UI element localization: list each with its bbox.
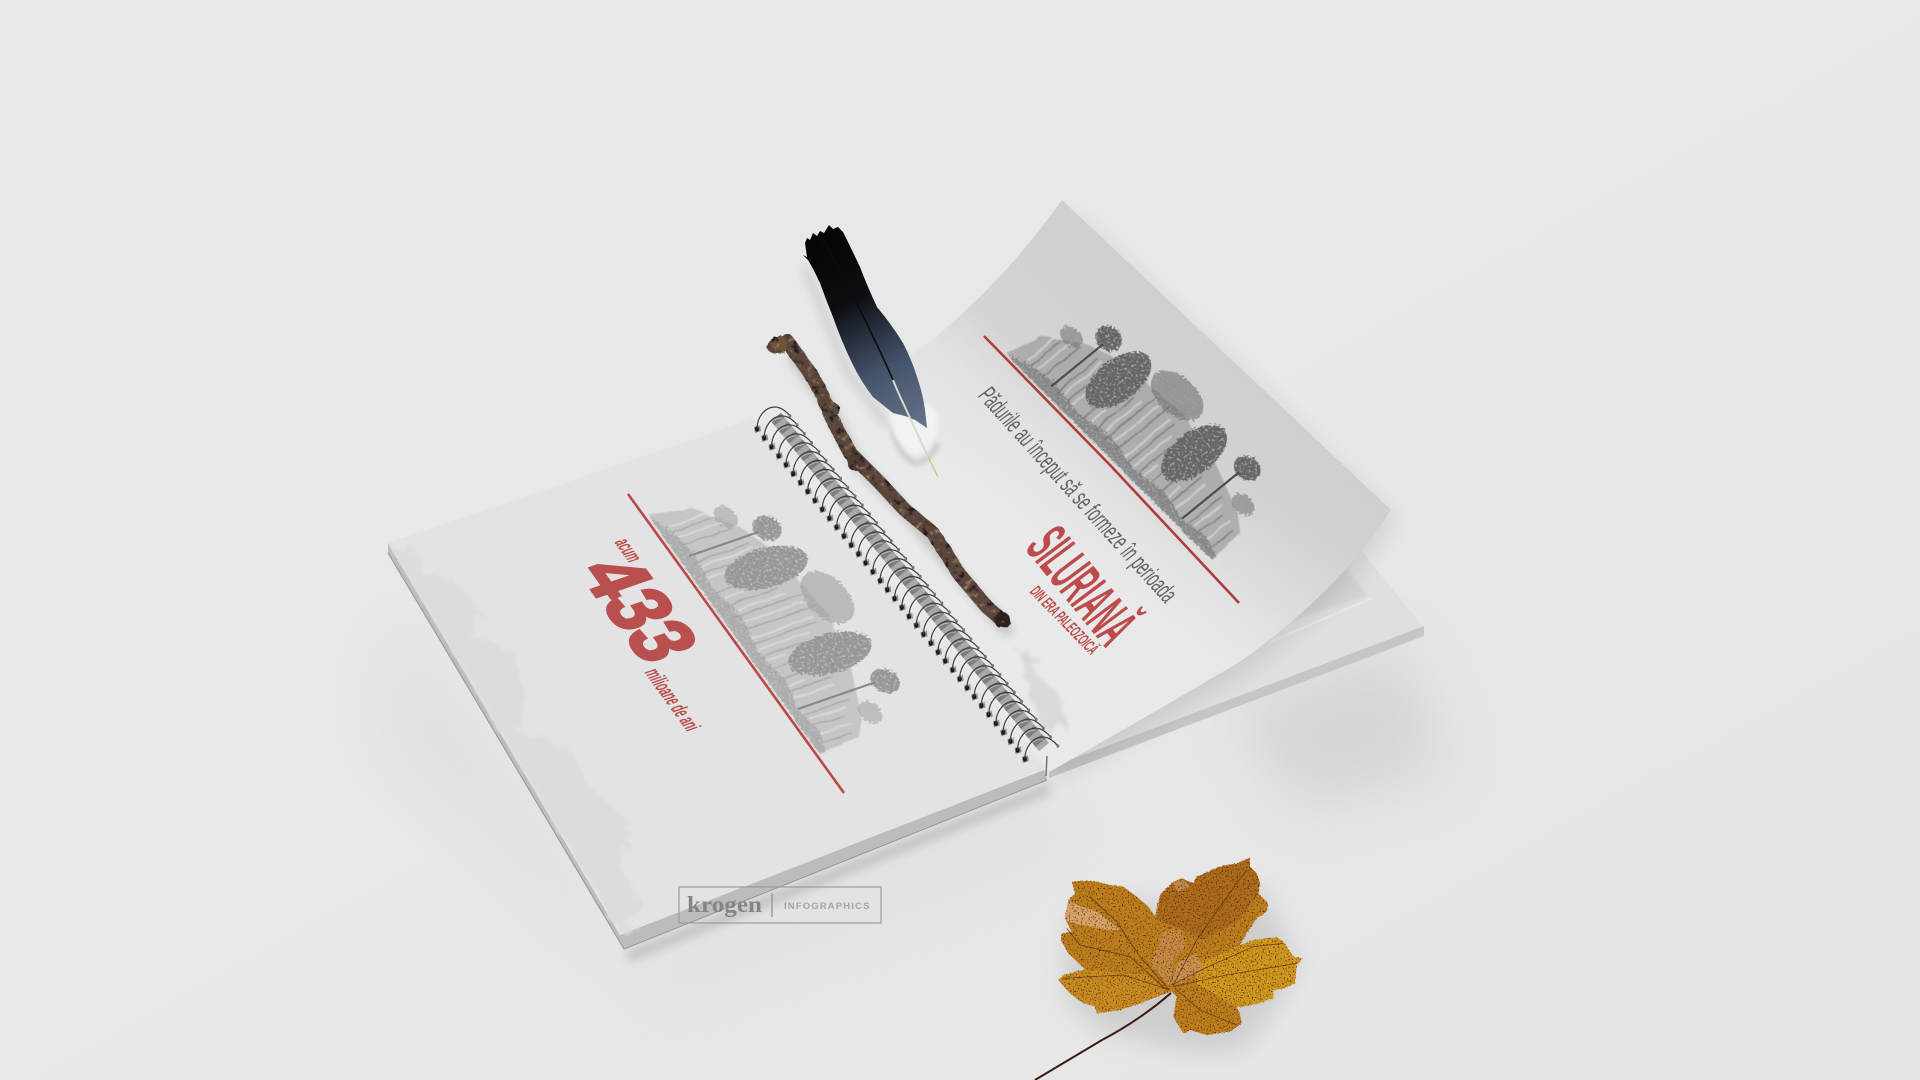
panel: right curled notebook page: SILURIANĂ <box>1013 515 1150 657</box>
engraving: forest, left page <box>648 475 936 754</box>
text: acum: acum <box>609 535 648 565</box>
text: DIN ERA PALEOZOICĂ: DIN ERA PALEOZOICĂ <box>1026 583 1103 658</box>
logo: krogen infographics: krogen <box>687 892 762 917</box>
engraving: forest, right page <box>1006 284 1298 560</box>
leaf blade outline <box>1058 857 1303 1035</box>
icon: twig <box>772 337 1010 633</box>
top lobe tone <box>1157 857 1260 940</box>
right lobe tone <box>1197 937 1303 1007</box>
leaf veins <box>1063 870 1297 1025</box>
feather fluff <box>890 402 938 463</box>
icon: feather <box>803 225 938 477</box>
leaf stem <box>1035 993 1171 1080</box>
forest silhouette watermark <box>392 548 642 932</box>
icon: autumn leaf <box>1035 857 1303 1080</box>
text: Pădurile au început să se formeze în perioada: Pădurile au început să se formeze în perioada <box>972 382 1185 608</box>
lower-left lobe tone <box>1058 969 1167 1013</box>
spiral binding <box>754 407 1059 776</box>
logo: krogen infographics <box>679 887 881 923</box>
red divider line <box>628 494 844 793</box>
center fold <box>1150 928 1185 987</box>
panel: right curled notebook page <box>772 200 1395 782</box>
red divider line <box>984 336 1239 603</box>
number: 433: 433 <box>561 546 718 672</box>
soft shadow under notebook <box>390 620 1450 1000</box>
notebook under page (right side, bottom sheet) <box>1044 500 1424 778</box>
faint silhouette near spine <box>1016 650 1066 735</box>
logo: krogen infographics: INFOGRAPHICS <box>784 901 871 912</box>
panel: left notebook page: milioane de ani <box>639 665 706 734</box>
panel: left notebook page <box>388 419 1047 949</box>
